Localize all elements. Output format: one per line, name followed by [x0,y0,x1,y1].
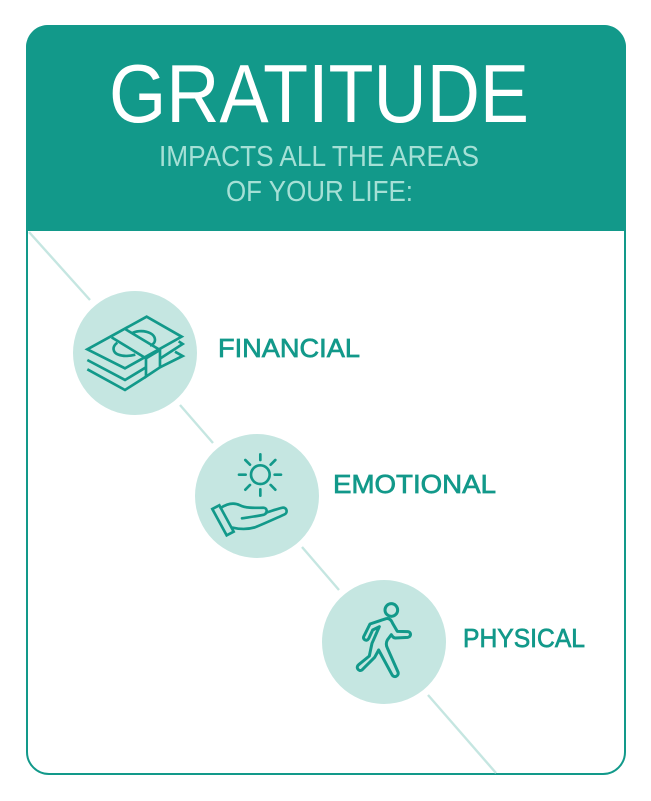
subtitle: IMPACTS ALL THE AREAS [159,141,479,173]
icon: hand with sun [212,454,287,535]
diagonal connector lines [29,232,496,773]
icon: money circle [73,291,197,415]
panel: header band [26,25,626,231]
icon: physical circle [322,580,446,704]
title: GRATITUDE [109,47,529,140]
label: financial: FINANCIAL [218,333,360,363]
subtitle [159,141,479,208]
icon: walking person [357,604,410,677]
subtitle: OF YOUR LIFE: [226,176,413,208]
icon: emotional circle [195,434,319,558]
icon: stack of money [87,317,183,390]
label: emotional: EMOTIONAL [333,469,496,499]
label: physical: PHYSICAL [463,623,585,653]
